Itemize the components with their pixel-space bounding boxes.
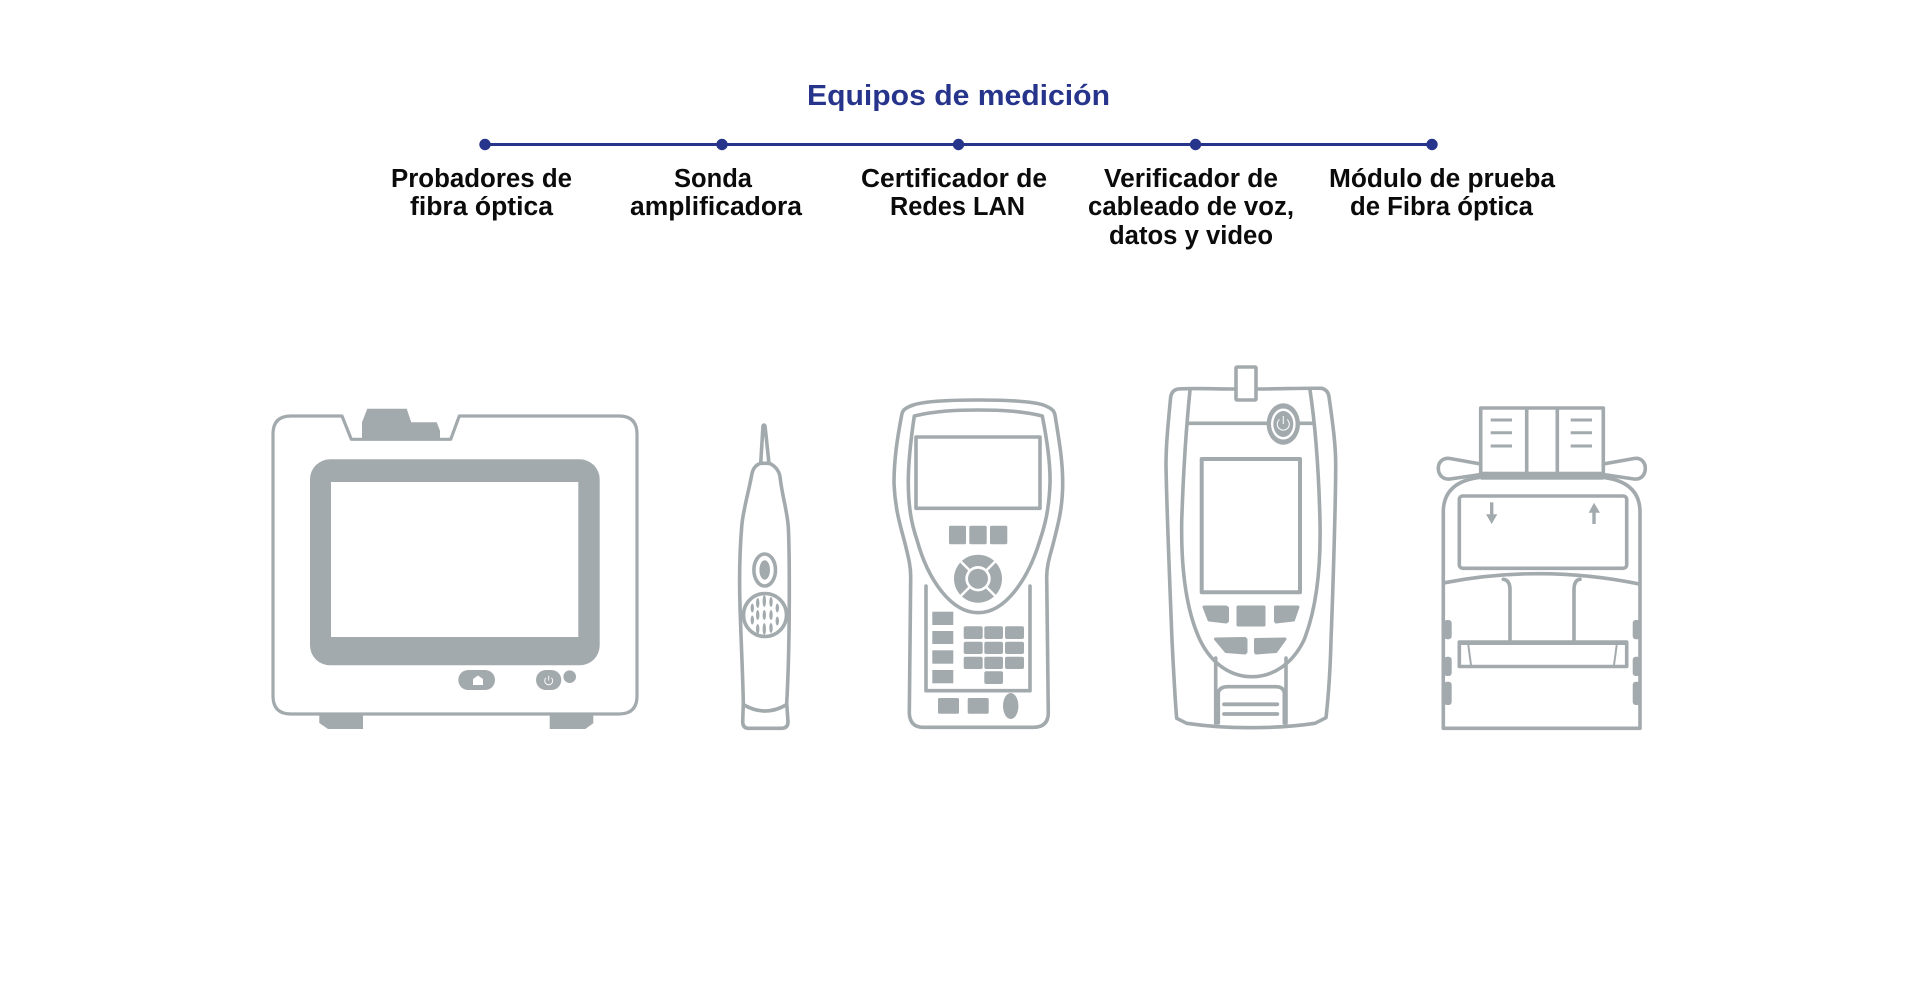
arrow: up [1589,503,1600,524]
device: módulo de prueba de fibra óptica [1438,408,1645,728]
label: certificador de redes lan: Redes LAN [890,193,1025,221]
label: módulo de prueba: de Fibra óptica [1350,193,1534,221]
device: sonda amplificadora [740,425,789,728]
label: módulo de prueba: Módulo de prueba [1329,165,1556,193]
device: certificador de redes lan [894,400,1063,727]
label: probadores de fibra óptica: fibra óptica [410,193,554,221]
label: probadores de fibra óptica [391,165,572,221]
label: verificador de cableado: cableado de voz, [1088,193,1294,221]
label: sonda amplificadora: amplificadora [630,193,803,221]
power button [1267,403,1300,445]
label: sonda amplificadora [630,165,803,221]
label: verificador de cableado [1088,165,1294,250]
label: sonda amplificadora: Sonda [674,165,753,193]
label: certificador de redes lan: Certificador de [861,165,1047,193]
arrow: down [1486,502,1497,524]
title: Equipos de medición [807,80,1110,112]
label: certificador de redes lan [861,165,1047,221]
label: probadores de fibra óptica: Probadores de [391,165,572,193]
label: verificador de cableado: Verificador de [1104,165,1278,193]
label: módulo de prueba [1329,165,1556,221]
device: probador de fibra óptica [273,409,637,729]
device: verificador de cableado [1166,367,1336,728]
timeline [479,139,1438,150]
label: verificador de cableado: datos y video [1109,222,1273,250]
d-pad [954,555,1002,603]
